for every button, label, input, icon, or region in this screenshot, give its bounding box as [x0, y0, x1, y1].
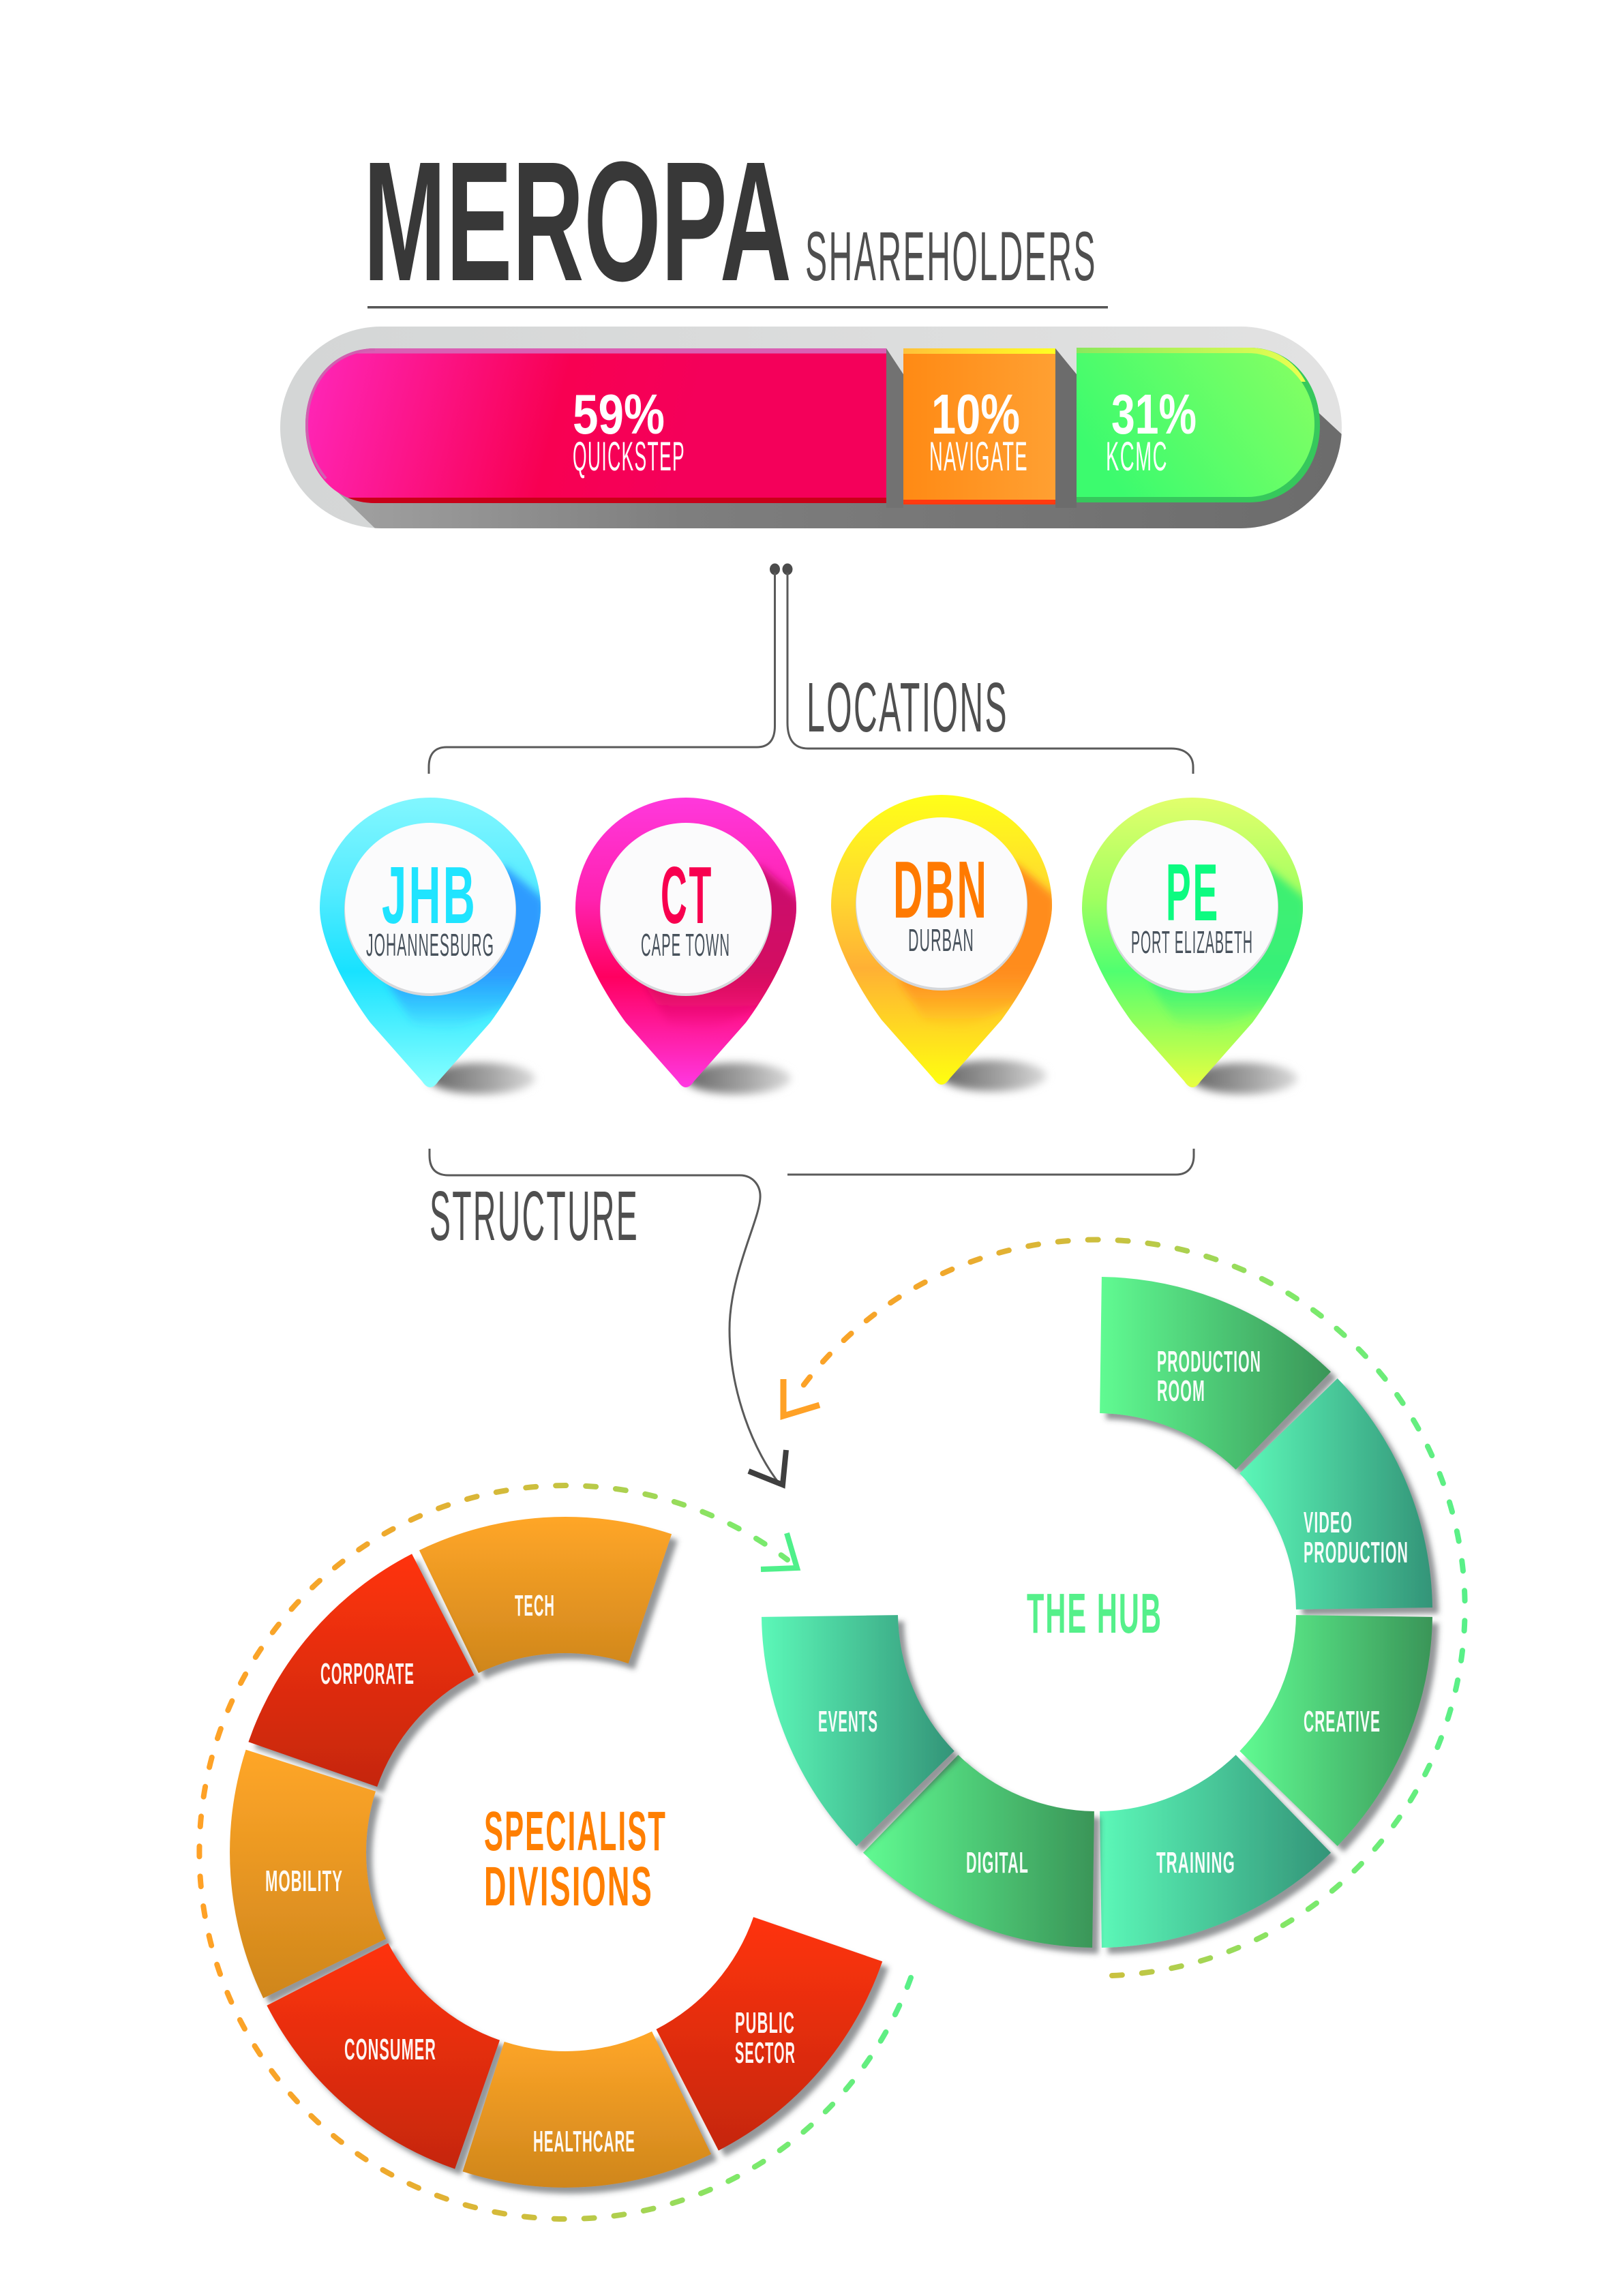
segment: creative	[1239, 1615, 1432, 1846]
pin: Johannesburg	[320, 798, 545, 1094]
segment: Quickstep 59%: QUICKSTEP	[573, 434, 685, 479]
segment: Navigate 10%: 10%	[931, 382, 1020, 446]
segment: KCMC 31%: KCMC	[1106, 434, 1168, 479]
pin: Durban: DURBAN	[908, 922, 974, 958]
segment: mobility	[230, 1750, 386, 1998]
pin: Cape Town: CAPE TOWN	[641, 927, 730, 963]
pin: Johannesburg: JOHANNESBURG	[366, 927, 494, 963]
segment: tech: TECH	[515, 1589, 555, 1622]
segment: public sector: SECTOR	[735, 2036, 796, 2070]
segment: creative: CREATIVE	[1304, 1705, 1381, 1738]
pin: Port Elizabeth	[1082, 798, 1307, 1094]
text: STRUCTURE	[430, 1177, 639, 1255]
heading: SPECIALIST DIVISIONS	[484, 1800, 667, 1918]
segment: Quickstep 59%: 59%	[573, 382, 665, 446]
segment: healthcare	[463, 2031, 711, 2188]
segment: production room: PRODUCTION	[1157, 1345, 1261, 1378]
segment: digital: DIGITAL	[966, 1846, 1029, 1879]
pin: Cape Town	[575, 798, 800, 1094]
segment: events: EVENTS	[818, 1705, 878, 1738]
heading: THE HUB: THE HUB	[1027, 1582, 1162, 1645]
segment: KCMC 31%: 31%	[1111, 382, 1197, 446]
segment: Quickstep 59%	[305, 348, 886, 503]
segment: public sector: PUBLIC	[735, 2006, 795, 2040]
pin: Port Elizabeth: PE	[1166, 847, 1220, 938]
connector: bar to locations	[429, 563, 1193, 774]
segment: digital	[863, 1755, 1094, 1948]
connector: locations to structure	[430, 1149, 1194, 1486]
segment: production room	[1100, 1277, 1331, 1470]
segment: video production: PRODUCTION	[1304, 1536, 1409, 1569]
heading: SPECIALIST DIVISIONS: DIVISIONS	[484, 1856, 653, 1918]
segment: Navigate 10%: NAVIGATE	[929, 434, 1028, 479]
text: LOCATIONS	[807, 668, 1008, 746]
title underline	[367, 306, 1108, 308]
segment: consumer	[267, 1943, 500, 2169]
dashed arrow loop: specialist divisions	[199, 1485, 911, 2219]
segment: events	[762, 1615, 954, 1846]
arrow head: structure connector	[749, 1450, 786, 1485]
pin: Port Elizabeth: PORT ELIZABETH	[1131, 924, 1253, 960]
segment: training: TRAINING	[1156, 1846, 1235, 1879]
segment: training	[1100, 1755, 1331, 1948]
title: MEROPA: MEROPA	[363, 126, 792, 316]
heading: SPECIALIST DIVISIONS: SPECIALIST	[484, 1800, 667, 1862]
panel: shareholder bar	[280, 327, 1342, 528]
wheel: specialist divisions	[230, 1517, 882, 2188]
text: SHAREHOLDERS	[805, 217, 1097, 295]
segment: healthcare: HEALTHCARE	[533, 2125, 635, 2158]
dashed arrow loop: the hub	[783, 1239, 1465, 1976]
pin: Johannesburg: JHB	[382, 850, 477, 941]
wheel: the hub	[762, 1277, 1432, 1948]
segment: mobility: MOBILITY	[265, 1864, 343, 1898]
segment: video production	[1239, 1378, 1432, 1610]
segment: video production: VIDEO	[1304, 1506, 1353, 1539]
segment: public sector	[656, 1917, 882, 2151]
pin: Cape Town: CT	[661, 850, 713, 941]
segment: KCMC 31%	[1077, 348, 1320, 502]
bar cast shadow	[327, 348, 1342, 528]
pin: Durban: DBN	[893, 845, 989, 935]
segment: corporate: CORPORATE	[320, 1657, 415, 1691]
bar outer capsule	[280, 327, 1342, 528]
segment: corporate	[248, 1554, 475, 1787]
segment: consumer: CONSUMER	[344, 2033, 436, 2066]
segment: production room: ROOM	[1157, 1374, 1205, 1408]
segment: tech	[419, 1517, 672, 1673]
pin: Durban	[831, 795, 1056, 1091]
segment: Navigate 10%	[903, 348, 1055, 504]
